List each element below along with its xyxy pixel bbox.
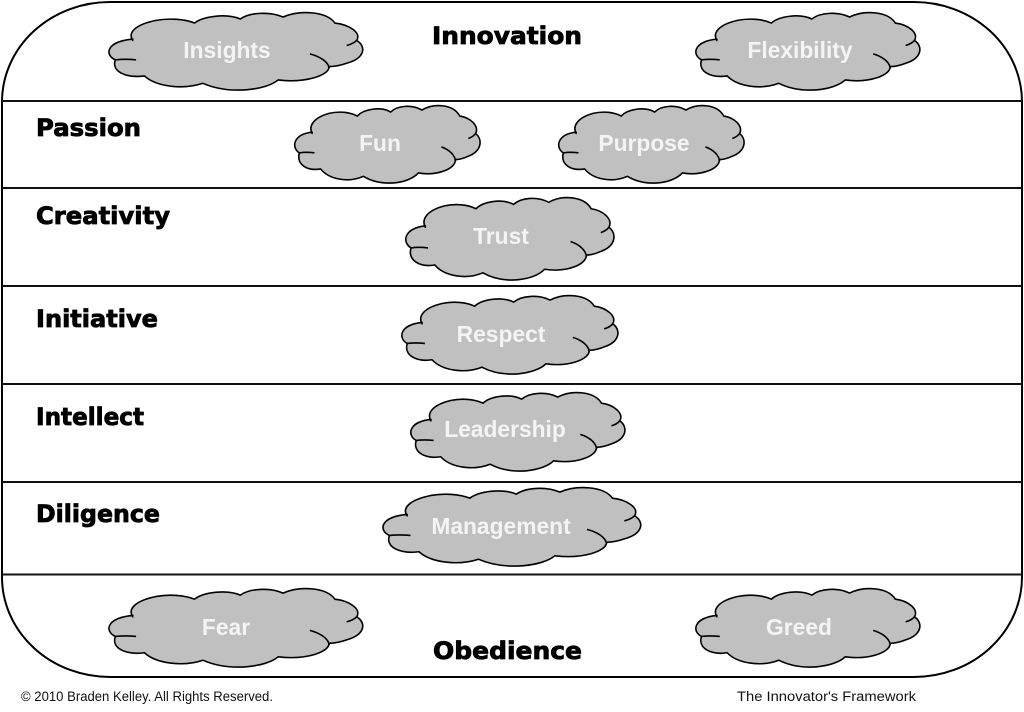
label: Intellect: Intellect xyxy=(36,403,144,431)
footer: copyright: © 2010 Braden Kelley. All Rights Reserved. xyxy=(21,689,273,704)
cloud: Leadership xyxy=(411,393,625,471)
label: Initiative: Initiative xyxy=(36,305,158,333)
cloud: Fun: Fun xyxy=(359,130,401,156)
cloud: Trust: Trust xyxy=(473,223,529,249)
cloud: Management xyxy=(383,488,641,566)
cloud: Fun xyxy=(295,106,480,183)
cloud: Fear xyxy=(109,589,363,667)
label: Passion: Passion xyxy=(36,114,141,142)
cloud: Leadership: Leadership xyxy=(444,416,566,442)
cloud: Flexibility xyxy=(696,13,920,90)
cloud: Management: Management xyxy=(431,513,571,539)
cloud: Flexibility: Flexibility xyxy=(747,37,853,63)
cloud: Greed xyxy=(696,589,920,667)
label: Diligence: Diligence xyxy=(36,500,160,528)
heading: Obedience: Obedience xyxy=(433,637,582,665)
cloud: Respect: Respect xyxy=(457,321,546,347)
heading: Innovation: Innovation xyxy=(432,22,582,50)
cloud: Greed: Greed xyxy=(766,614,832,640)
label: Creativity: Creativity xyxy=(36,202,170,230)
footer: framework name: The Innovator's Framework xyxy=(737,689,916,704)
cloud: Insights: Insights xyxy=(183,37,271,63)
cloud: Purpose xyxy=(559,106,744,183)
cloud: Purpose: Purpose xyxy=(598,130,690,156)
cloud: Respect xyxy=(402,296,618,374)
cloud: Insights xyxy=(109,13,363,90)
cloud: Fear: Fear xyxy=(202,614,250,640)
cloud: Trust xyxy=(406,198,614,280)
